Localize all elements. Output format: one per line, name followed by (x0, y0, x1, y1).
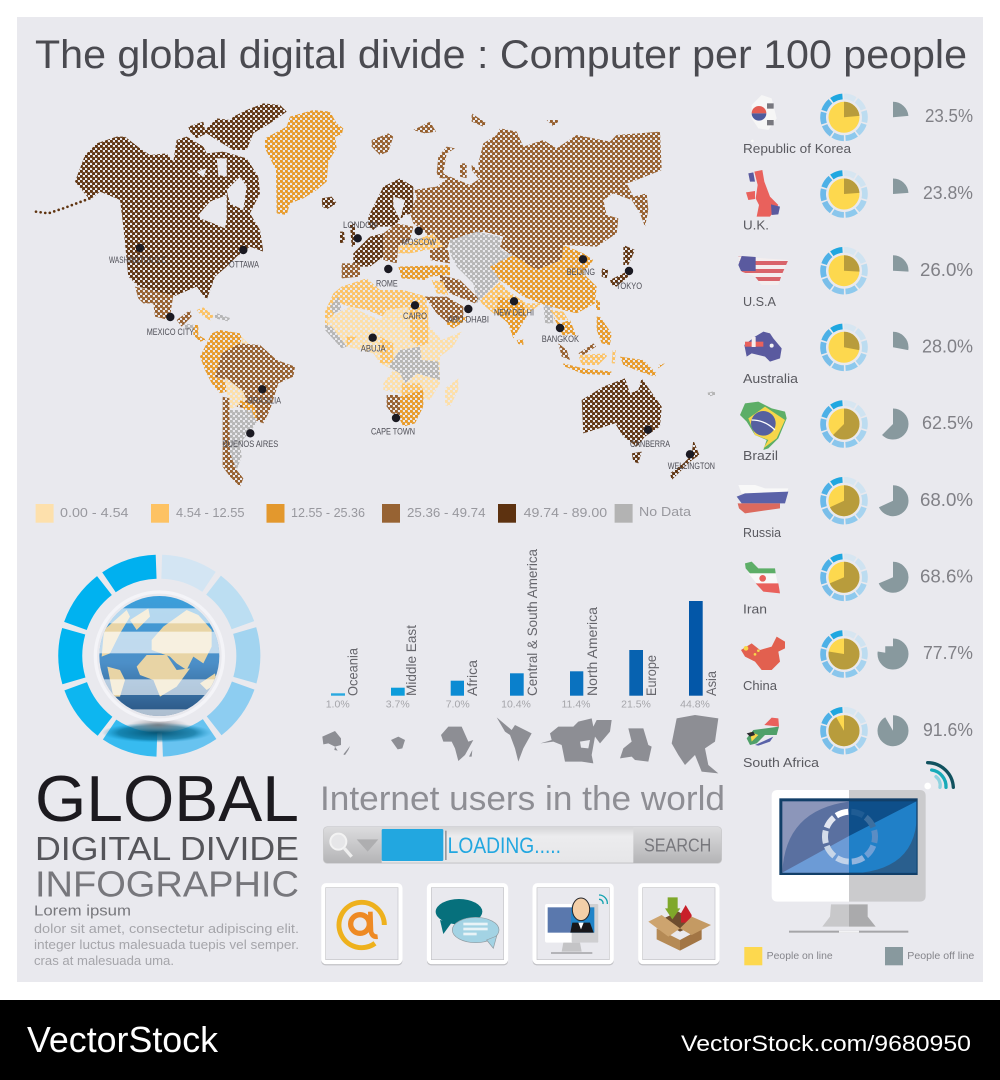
west sahara (330, 297, 342, 313)
congo (388, 347, 440, 383)
row: South Africa: 91.6% (923, 719, 973, 740)
capital labels: BEIJING (567, 267, 595, 277)
namibia (387, 395, 400, 415)
arabia (425, 297, 463, 323)
row: Brazil: 62.5% (922, 412, 973, 433)
row: U.K.: U.K. (743, 218, 769, 232)
capital labels: OTTAWA (229, 260, 259, 270)
north med (398, 233, 443, 253)
capital labels (109, 220, 715, 471)
new guinea (620, 357, 657, 377)
north america (75, 137, 263, 300)
new zealand (670, 440, 699, 480)
borneo (578, 353, 607, 365)
region labels: Europe (643, 655, 659, 696)
row: U.S.A (738, 241, 973, 309)
nigeria (380, 337, 393, 363)
lorem text block: dolor sit amet, consectetur adipiscing elit. (34, 922, 299, 936)
capital labels: MEXICO CITY (147, 327, 194, 337)
argentina (230, 410, 257, 470)
thailand (553, 317, 577, 337)
china (490, 245, 597, 313)
row: China: China (743, 678, 778, 693)
madagascar (445, 378, 458, 407)
greenland (265, 110, 343, 215)
monitor illustration (772, 763, 953, 933)
row: South Africa (743, 701, 973, 770)
flag: Iran (745, 562, 780, 593)
indochina (550, 310, 568, 320)
row: Brazil (740, 395, 973, 463)
heading: Global Digital Divide Infographic: GLOBAL (35, 762, 299, 835)
eastern europe (383, 223, 413, 263)
flag: Australia (744, 332, 782, 362)
row: Iran (743, 548, 973, 616)
heading: Internet users in the world: Internet users in the world (320, 780, 725, 818)
capital labels: CAPE TOWN (371, 427, 415, 437)
lorem text block (34, 903, 299, 968)
big ring with globe (58, 554, 260, 757)
icon: wifi (924, 763, 953, 789)
capital labels: CAIRO (403, 311, 427, 321)
malaysia (558, 343, 570, 360)
capital labels: ABUJA (361, 344, 386, 354)
row: South Africa: South Africa (743, 755, 820, 770)
row: Australia: 28.0% (922, 336, 973, 356)
map legend: 0.00 - 4.54 (60, 505, 128, 520)
country list (737, 88, 973, 770)
row: U.K.: 23.8% (923, 182, 973, 203)
flag: UK (746, 170, 780, 217)
values: 7.0% (446, 699, 470, 711)
britain (350, 223, 355, 247)
region labels: Africa (464, 660, 480, 696)
capital labels: TOKYO (616, 281, 642, 291)
legend: people on line (744, 947, 833, 965)
monitor body (772, 790, 926, 902)
guinea (347, 337, 357, 347)
iberia (342, 263, 360, 278)
west europe (353, 233, 383, 267)
row: Brazil: Brazil (743, 448, 778, 463)
vietnam (596, 300, 600, 310)
values (326, 699, 710, 711)
flag: Brazil (740, 402, 787, 450)
paraguay (238, 400, 257, 418)
bar chart: internet users by region (322, 549, 719, 773)
region labels: Asia (703, 671, 719, 696)
india (497, 297, 527, 338)
central africa (325, 307, 462, 400)
alaska tail (36, 198, 90, 213)
gydan (472, 165, 482, 178)
row: China: 77.7% (923, 642, 973, 663)
row: Russia: Russia (743, 525, 782, 540)
egypt sudan (410, 307, 428, 347)
monitor screen (779, 798, 918, 875)
world dot map (36, 103, 715, 487)
capital labels: WELLINGTON (668, 461, 715, 471)
tasmania (632, 452, 642, 463)
iran (440, 275, 478, 303)
flag: Korea (751, 95, 777, 142)
bolivia (225, 377, 247, 410)
mexico (135, 287, 173, 320)
icon: chat bubbles (427, 885, 508, 965)
capital labels: BUENOS AIRES (223, 439, 278, 449)
globe shadow (102, 718, 212, 743)
japan north (623, 245, 635, 265)
row: U.S.A: U.S.A (743, 294, 776, 309)
arctic islands (188, 103, 287, 150)
lorem text block: cras at malesuada uma. (34, 954, 174, 968)
south africa (400, 390, 423, 427)
row: Republic of Korea: 23.5% (925, 105, 973, 126)
panama (193, 325, 207, 342)
southern africa mid (402, 383, 423, 397)
scandinavia (368, 178, 413, 230)
values: 1.0% (326, 699, 350, 711)
footer watermark bar: VectorStock.com/9680950 (681, 1031, 971, 1056)
icon tiles (321, 885, 719, 965)
caucasus (430, 250, 450, 263)
flag: China (741, 637, 785, 670)
guyana (242, 337, 252, 351)
capital labels: NEW DELHI (494, 308, 534, 318)
row: Australia: Australia (743, 371, 799, 386)
row: U.S.A: 26.0% (920, 259, 973, 280)
segmented ring (34, 531, 284, 781)
legend: people on line: People on line (767, 951, 833, 962)
row: Republic of Korea (743, 88, 973, 156)
map legend (36, 504, 692, 523)
map legend: 12.55 - 25.36 (291, 505, 365, 520)
arctic isle a (413, 122, 436, 133)
java (563, 363, 612, 375)
capital labels: ROME (376, 279, 398, 289)
caribbean (197, 307, 214, 321)
yamal (460, 163, 467, 178)
capital markers (136, 227, 694, 458)
philippines (597, 317, 612, 345)
map legend: 49.74 - 89.00 (524, 505, 607, 520)
pakistan (480, 282, 542, 338)
png (658, 363, 665, 368)
search button label: SEARCH (644, 835, 711, 856)
screen ring (815, 802, 885, 872)
row: China (741, 625, 973, 693)
loading text: LOADING..... (448, 833, 561, 858)
heading: Global Digital Divide Infographic: DIGITAL DIVIDE (35, 831, 299, 868)
capital labels: BANGKOK (542, 334, 579, 344)
lorem text block: Lorem ipsum (34, 903, 131, 920)
central america (177, 310, 192, 327)
globe (95, 592, 223, 720)
row: Iran: 68.6% (920, 566, 973, 586)
svalbard (372, 133, 393, 155)
eurasia africa oceania (325, 113, 715, 480)
korea (602, 268, 608, 278)
region labels: Oceania (345, 648, 361, 696)
region labels: North America (584, 607, 600, 696)
borneo top (578, 343, 596, 355)
monitor stand (789, 904, 908, 933)
arctic isle c (547, 120, 560, 127)
capital labels: WASHINGTON D.C. (109, 255, 168, 265)
legend: people off line (885, 947, 975, 965)
south america north (200, 330, 242, 393)
values: 21.5% (621, 699, 651, 711)
legend: people off line: People off line (907, 951, 975, 962)
australia (582, 378, 662, 447)
footer watermark bar: VectorStock (27, 1019, 219, 1060)
icon: video call monitor (533, 885, 614, 965)
flag: Russia (737, 485, 788, 513)
map legend: 25.36 - 49.74 (407, 505, 486, 520)
iraq (432, 280, 448, 295)
values: 11.4% (562, 699, 590, 711)
oman (445, 317, 467, 328)
region labels: Central & South America (524, 549, 540, 696)
japan south (610, 272, 628, 287)
pacific grey (708, 391, 715, 397)
title: The global digital divide : Computer per 100 people (35, 33, 967, 77)
region labels: Middle East (403, 625, 419, 696)
kazakhstan (450, 232, 513, 303)
row: Russia: 68.0% (920, 489, 973, 510)
row: Russia (737, 471, 973, 540)
row: Republic of Korea: Republic of Korea (743, 141, 852, 156)
footer watermark bar (0, 1000, 1000, 1080)
map legend: 4.54 - 12.55 (176, 505, 244, 520)
brazil (215, 343, 295, 423)
capital labels: ABU DHABI (448, 315, 489, 325)
north africa (325, 278, 427, 330)
west africa grey (325, 325, 347, 348)
novaya zemlya (437, 147, 455, 178)
search bar (323, 827, 722, 863)
arctic isle b (472, 113, 487, 127)
row: Australia (743, 318, 973, 386)
capital labels: BRASILIA (248, 396, 281, 406)
map legend: No Data (639, 504, 692, 519)
sulawesi (612, 350, 616, 363)
heading: Global Digital Divide Infographic: INFOGRAPHIC (35, 864, 299, 905)
chile (223, 397, 243, 487)
turkey (398, 265, 450, 280)
caribbean grey (215, 313, 230, 321)
capital labels: CANBERRA (630, 439, 670, 449)
myanmar (543, 298, 553, 323)
uk (340, 232, 345, 244)
capital labels: LONDON (343, 220, 377, 230)
icon: cardboard box (638, 885, 719, 965)
heading: Global Digital Divide Infographic (35, 762, 299, 905)
values: 10.4% (501, 699, 531, 711)
icon: email at (321, 885, 402, 965)
region mini maps (322, 715, 718, 773)
capital labels: MOSCOW (402, 237, 437, 247)
values: 44.8% (680, 699, 710, 711)
row: Iran: Iran (743, 602, 767, 616)
lorem text block: integer luctus malesuada tuepis vel semper. (34, 938, 299, 952)
flag: USA (738, 256, 788, 285)
bars (331, 601, 703, 696)
values: 3.7% (386, 699, 410, 711)
iceland (322, 197, 337, 209)
americas (36, 103, 343, 487)
flag: South Africa (747, 718, 779, 746)
sri lanka (517, 339, 523, 345)
small grey (184, 323, 195, 330)
russia (410, 128, 662, 270)
row: U.K. (743, 165, 973, 232)
region labels (345, 549, 719, 696)
